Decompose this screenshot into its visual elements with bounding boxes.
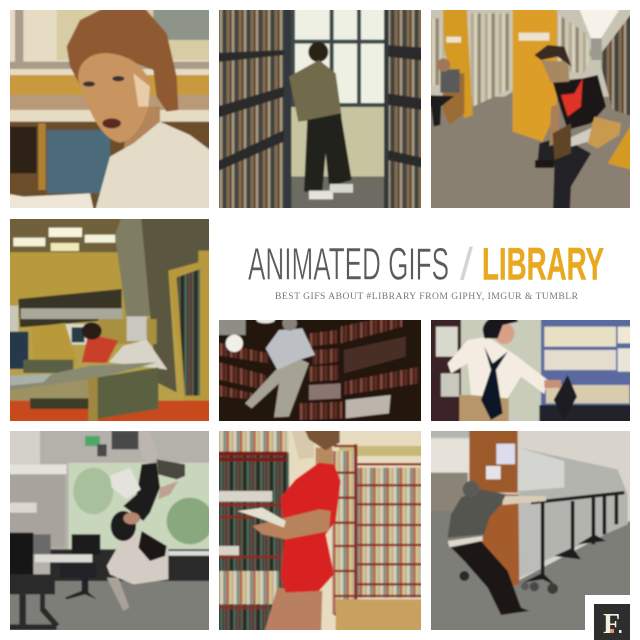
photo: empty yellow library room with tables bbox=[10, 219, 209, 421]
floor bbox=[10, 580, 209, 630]
person bbox=[459, 571, 469, 581]
dress bbox=[281, 463, 341, 593]
photo: guitarist in library aisle bbox=[431, 10, 630, 208]
guitarist bbox=[537, 140, 592, 208]
face bbox=[78, 53, 150, 143]
window bbox=[294, 10, 386, 104]
photo: woman dancing by library window bbox=[219, 10, 421, 208]
right shelves bbox=[357, 468, 437, 598]
slash divider: / bbox=[460, 238, 474, 290]
ceiling lights bbox=[13, 238, 45, 246]
seated reader bbox=[443, 73, 464, 125]
photo: woman in red dress reading bbox=[206, 418, 439, 640]
chairs and table bbox=[30, 534, 51, 554]
low wall bbox=[50, 549, 223, 583]
wall shelf bbox=[18, 289, 122, 327]
book bbox=[553, 375, 578, 406]
neck bbox=[123, 107, 160, 152]
light bbox=[226, 335, 243, 352]
left shelves bbox=[206, 418, 289, 640]
title bbox=[248, 238, 604, 290]
sweater bbox=[94, 121, 209, 208]
bookcase bbox=[168, 250, 209, 400]
logo letter: F bbox=[603, 609, 620, 640]
legs bbox=[261, 588, 322, 640]
carrels bbox=[98, 319, 157, 344]
shelves right bbox=[540, 320, 630, 406]
bookcase left bbox=[431, 320, 462, 421]
seated woman bbox=[82, 334, 118, 363]
logo badge bbox=[585, 595, 640, 640]
photo: woman with red hair in library bbox=[10, 10, 209, 208]
shelves bbox=[431, 18, 446, 86]
curved book rows bbox=[219, 342, 270, 364]
floor bbox=[418, 511, 640, 640]
column and dark wall bbox=[140, 219, 209, 392]
photo: woman in tie pulling book from shelf bbox=[431, 320, 630, 421]
dancer bbox=[308, 42, 328, 62]
climbing man bbox=[245, 358, 309, 417]
chairs bbox=[88, 367, 158, 419]
photo: acrobat flipping in office bbox=[10, 431, 209, 630]
shelf bases bbox=[531, 493, 624, 503]
hair, face bbox=[291, 428, 314, 459]
acrobat bbox=[107, 431, 185, 611]
title: animated gifs: ANIMATED GIFS bbox=[248, 238, 449, 290]
yellow shelf ends bbox=[443, 0, 473, 118]
floor bbox=[505, 92, 514, 98]
photo: person crawling under library shelves bbox=[418, 418, 640, 640]
arm bbox=[252, 509, 331, 539]
shelves bbox=[518, 448, 628, 561]
window bbox=[68, 463, 223, 549]
woman bbox=[458, 394, 510, 421]
wood column bbox=[469, 418, 518, 493]
subtitle: BEST GIFS ABOUT #LIBRARY FROM GIPHY, IMGUR & TUMBLR bbox=[275, 291, 579, 302]
floor bbox=[10, 400, 209, 421]
bookshelves bbox=[219, 10, 284, 54]
table bbox=[10, 362, 156, 391]
book bbox=[237, 508, 286, 528]
floor bbox=[336, 599, 439, 640]
hair bbox=[67, 7, 178, 112]
photo: man climbing dark red bookshelf bbox=[219, 320, 421, 421]
